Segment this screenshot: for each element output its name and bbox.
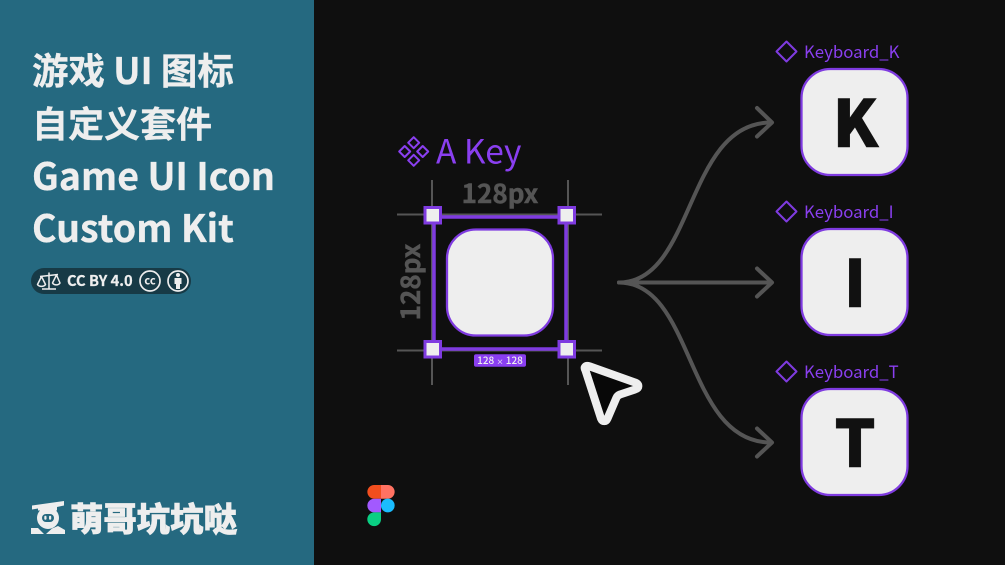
panel: left sidebar xyxy=(0,0,314,565)
arrow: to Keyboard_K xyxy=(619,108,772,282)
heading text: A Key xyxy=(436,124,521,174)
key tile xyxy=(802,389,908,495)
cursor xyxy=(585,366,638,421)
variant label: Keyboard_T xyxy=(804,359,899,383)
key variant T xyxy=(776,359,908,495)
title line 4: Custom Kit xyxy=(32,198,234,253)
key variant K xyxy=(776,39,908,175)
icon: figma logo xyxy=(367,485,395,526)
title line 2: 自定义套件 xyxy=(32,96,212,148)
icon: attribution xyxy=(168,271,188,291)
blank key tile xyxy=(447,230,553,336)
arrow: to Keyboard_I xyxy=(619,268,772,296)
size tag: 128 × 128 xyxy=(477,352,523,367)
selection frame xyxy=(425,208,574,357)
icon: mascot xyxy=(31,501,65,534)
variant label: Keyboard_I xyxy=(804,199,894,223)
icon: instance diamond xyxy=(776,42,796,62)
key letter: I xyxy=(844,232,866,326)
selection handles xyxy=(425,208,574,357)
icon: cc: cc xyxy=(144,272,156,288)
brand logo xyxy=(31,493,237,541)
guide lines xyxy=(397,180,602,385)
icon: instance diamond xyxy=(776,362,796,382)
title line 1: 游戏 UI 图标 xyxy=(32,42,234,95)
variant label: Keyboard_K xyxy=(804,39,900,63)
key variant I xyxy=(776,199,908,335)
key letter: K xyxy=(832,72,879,166)
key letter: T xyxy=(834,392,876,486)
width dimension label: 128px xyxy=(462,174,539,211)
key tile xyxy=(802,229,908,335)
icon: component diamonds xyxy=(399,137,428,166)
height dimension label: 128px xyxy=(391,243,428,320)
title line 3: Game UI Icon xyxy=(32,146,275,201)
arrow: to Keyboard_T xyxy=(619,282,772,456)
key tile xyxy=(802,69,908,175)
component heading xyxy=(399,124,521,174)
icon: instance diamond xyxy=(776,202,796,222)
license text: CC BY 4.0 xyxy=(67,270,133,291)
icon: scales xyxy=(38,272,60,289)
icon: cc xyxy=(140,271,160,291)
license badge xyxy=(31,268,191,294)
brand name: 萌哥坑坑哒 xyxy=(70,493,237,541)
